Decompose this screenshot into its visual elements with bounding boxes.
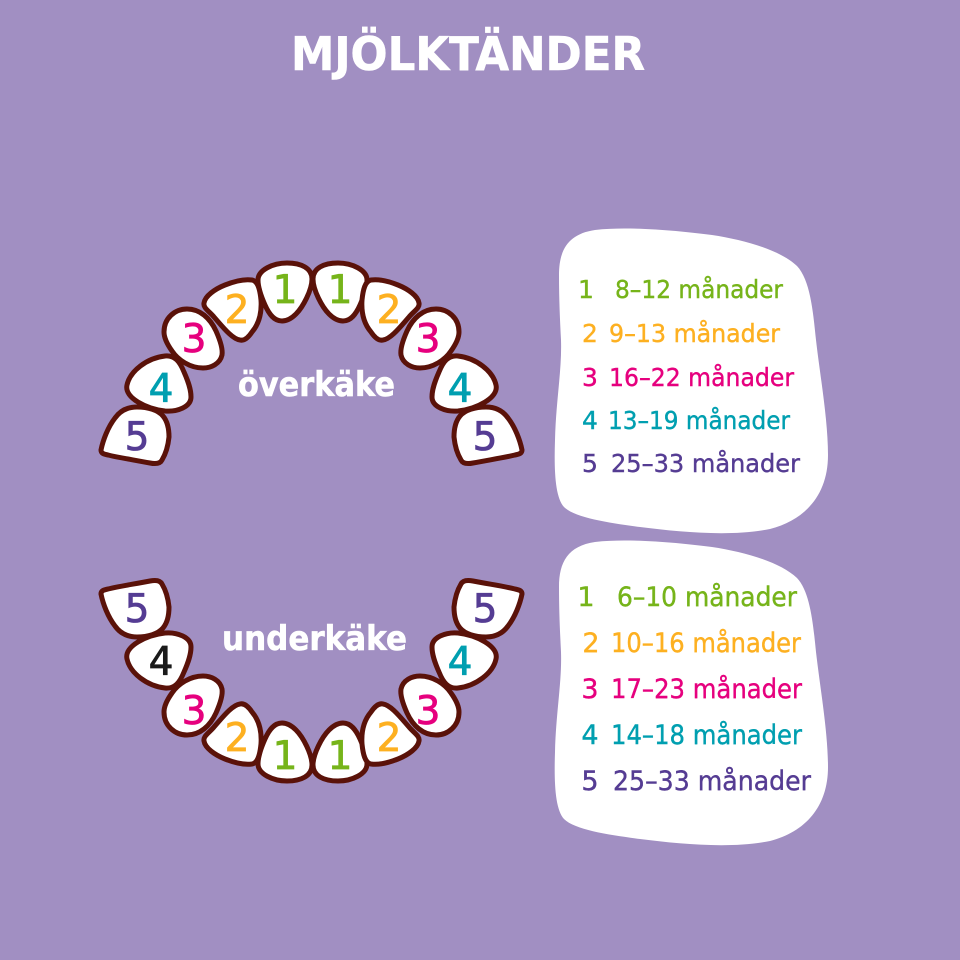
tooth: upper right 4 — [432, 356, 496, 412]
row 3: 17–23 månader — [611, 674, 803, 705]
tooth: lower right 2 — [362, 704, 419, 764]
tooth: upper right 2 — [362, 280, 419, 340]
row 1: 1 — [578, 275, 594, 304]
tooth: upper right 1 — [313, 263, 367, 321]
tooth: lower left 2 — [204, 704, 261, 764]
row 3: 3 — [582, 363, 598, 392]
row 2: 2 — [582, 319, 598, 348]
label: överkäke: överkäke — [238, 365, 395, 405]
tooth: upper left 4 — [127, 356, 191, 412]
tooth: upper left 5: 5 — [125, 415, 149, 460]
tooth: upper right 1: 1 — [328, 268, 352, 313]
upper jaw diagram — [101, 263, 522, 464]
tooth: lower right 5 — [454, 580, 522, 637]
tooth: lower left 2: 2 — [225, 716, 249, 761]
tooth: lower left 3 — [164, 676, 222, 735]
tooth: upper left 5 — [101, 407, 169, 464]
row 4: 4 — [582, 406, 598, 435]
row 2: 9–13 månader — [609, 319, 781, 348]
row 2: 2 — [582, 628, 600, 659]
tooth: upper left 1 — [258, 263, 312, 321]
row 5: 25–33 månader — [613, 766, 812, 797]
tooth: upper left 2: 2 — [225, 288, 249, 333]
tooth: upper left 3: 3 — [182, 317, 206, 362]
tooth: lower left 4 — [127, 633, 191, 688]
tooth: lower right 5: 5 — [473, 587, 497, 632]
tooth: upper right 3: 3 — [416, 317, 440, 362]
lower jaw diagram — [101, 580, 522, 781]
row 5: 25–33 månader — [611, 449, 801, 478]
tooth: upper right 5: 5 — [473, 415, 497, 460]
row 5: 5 — [582, 449, 598, 478]
tooth: lower left 5: 5 — [125, 587, 149, 632]
tooth: upper left 2 — [204, 280, 261, 340]
tooth: upper right 4: 4 — [448, 367, 472, 412]
tooth: upper right 2: 2 — [377, 288, 401, 333]
tooth: lower right 4: 4 — [448, 640, 472, 685]
row 3: 3 — [581, 674, 599, 705]
panel background — [555, 229, 828, 533]
panel background — [555, 541, 828, 845]
tooth: lower left 1: 1 — [273, 734, 297, 779]
row 5: 5 — [581, 766, 599, 797]
row 3: 16–22 månader — [609, 363, 795, 392]
label: underkäke: underkäke — [222, 619, 407, 659]
tooth: upper right 5 — [454, 407, 522, 464]
tooth: upper right 3 — [401, 309, 459, 368]
tooth: lower right 4 — [432, 633, 496, 688]
tooth: upper left 3 — [164, 309, 222, 368]
panel: lower jaw ages — [555, 541, 828, 845]
row 1: 8–12 månader — [615, 275, 784, 304]
tooth: lower left 3: 3 — [182, 689, 206, 734]
panel: upper jaw ages — [555, 229, 828, 533]
row 4: 4 — [581, 720, 599, 751]
tooth: lower right 2: 2 — [377, 716, 401, 761]
tooth: upper left 1: 1 — [273, 268, 297, 313]
tooth: lower right 1: 1 — [328, 734, 352, 779]
row 4: 14–18 månader — [611, 720, 803, 751]
tooth: lower right 1 — [313, 723, 367, 781]
tooth: lower left 1 — [258, 723, 312, 781]
tooth: upper left 4: 4 — [149, 367, 173, 412]
title: MJÖLKTÄNDER — [291, 27, 645, 81]
tooth: lower right 3: 3 — [416, 689, 440, 734]
tooth: lower right 3 — [401, 676, 459, 735]
tooth: lower left 5 — [101, 580, 169, 637]
row 4: 13–19 månader — [608, 406, 791, 435]
row 1: 6–10 månader — [617, 582, 798, 613]
row 1: 1 — [577, 582, 595, 613]
row 2: 10–16 månader — [611, 628, 802, 659]
tooth: lower left 4: 4 — [149, 640, 173, 685]
